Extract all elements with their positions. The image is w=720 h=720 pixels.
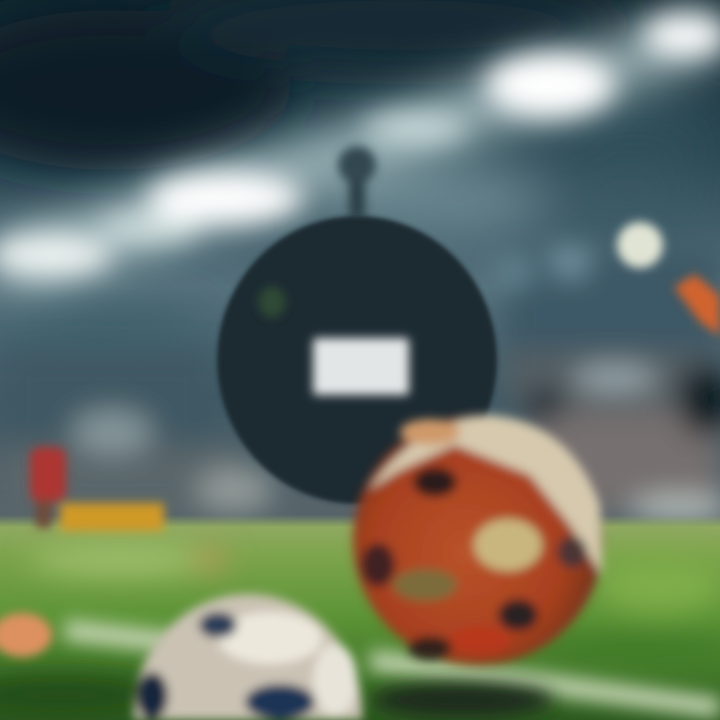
ball: foreground soccer ball	[134, 594, 362, 720]
accent: faint green mark	[258, 286, 286, 318]
field: green pitch	[0, 515, 720, 720]
badge: dark central circle	[217, 146, 497, 504]
shape: orange flare on right	[674, 274, 720, 336]
banner: yellow advertising board	[60, 503, 164, 531]
shadow: under the large ball	[370, 682, 554, 718]
figure: red player	[30, 447, 66, 528]
icon: figure head above circle	[338, 146, 376, 218]
label: white blurred rectangle	[313, 338, 409, 395]
ball: small orange at left	[0, 613, 52, 657]
ball: large orange patterned football	[353, 415, 603, 665]
ball: flying white ball	[617, 222, 663, 268]
dark storm clouds	[0, 0, 720, 380]
bright cloud band	[0, 16, 720, 275]
stadium stands	[0, 248, 720, 521]
